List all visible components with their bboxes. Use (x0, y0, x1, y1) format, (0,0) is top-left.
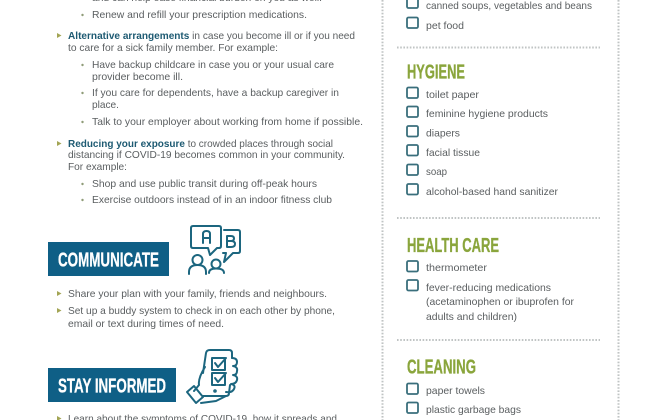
text block: alternative arrangements: place. (92, 99, 119, 111)
text block: alternative arrangements: to care for a sick family member. For example: (68, 42, 278, 54)
text block: alternative arrangements: If you care for dependents, have a backup caregiver in (92, 87, 339, 99)
heading: hygiene: HYGIENE (407, 62, 465, 84)
checklist: hygiene (407, 62, 558, 198)
heading: cleaning: CLEANING (407, 356, 476, 378)
icon: two people talking with A and B speech bubbles (189, 226, 240, 274)
checklist: cleaning: plastic garbage bags (426, 404, 521, 416)
text block: reducing your exposure: Exercise outdoors instead of in an indoor fitness club (92, 194, 332, 206)
text block: reducing your exposure: For example: (68, 161, 127, 173)
text block: alternative arrangements: Have backup childcare in case you or your usual care (92, 59, 334, 71)
checklist: hygiene: feminine hygiene products (426, 108, 548, 120)
checklist: hygiene: facial tissue (426, 147, 480, 159)
heading: health care: HEALTH CARE (407, 235, 499, 257)
checklist: health care: adults and children) (426, 311, 517, 323)
checklist: hygiene: alcohol-based hand sanitizer (426, 186, 558, 198)
text block: reducing your exposure (57, 138, 345, 206)
heading: communicate: COMMUNICATE (58, 250, 159, 272)
checklist: food items: canned soups, vegetables and beans (426, 0, 592, 12)
text block: alternative arrangements (57, 30, 363, 128)
heading: communicate (48, 242, 169, 276)
panel: left column plan (48, 0, 363, 420)
heading: stay informed: STAY INFORMED (58, 376, 166, 398)
text block: communicate bullets: email or text during times of need. (68, 318, 224, 330)
checklist: health care: thermometer (426, 262, 488, 274)
text block: communicate bullets: Share your plan with your family, friends and neighbours. (68, 288, 327, 300)
icon: hand holding phone with checklist (187, 350, 237, 403)
text block: alternative arrangements: provider become ill. (92, 71, 183, 83)
checklist: hygiene: toilet paper (426, 89, 480, 101)
checklist: hygiene: diapers (426, 128, 460, 140)
text block: alternative arrangements: Talk to your employer about working from home if possible. (92, 116, 363, 128)
text block: reducing your exposure: Shop and use public transit during off-peak hours (92, 178, 317, 190)
panel: dotted checklist frame (382, 0, 618, 420)
text block: financial and medication bullets: Renew and refill your prescription medications. (92, 9, 307, 21)
text block: communicate bullets: Set up a buddy system to check in on each other by phone, (68, 305, 335, 317)
checklist: food items (407, 0, 592, 32)
text block: communicate bullets (57, 288, 335, 330)
checklist: health care (407, 235, 574, 323)
text block: financial and medication bullets (81, 0, 322, 21)
checklist: health care: (acetaminophen or ibuprofen for (426, 296, 574, 308)
text block: reducing your exposure: distancing if COVID-19 becomes common in your community. (68, 149, 345, 161)
text block: alternative arrangements: Alternative arrangements in case you become ill or if you need (68, 30, 355, 42)
checklist: cleaning: paper towels (426, 385, 485, 397)
checklist: health care: fever-reducing medications (426, 282, 551, 294)
heading: stay informed (48, 368, 176, 402)
checklist: cleaning (407, 356, 521, 416)
checklist: food items: pet food (426, 20, 464, 32)
text block: reducing your exposure: Reducing your exposure to crowded places through social (68, 138, 333, 150)
checklist: hygiene: soap (426, 166, 447, 178)
